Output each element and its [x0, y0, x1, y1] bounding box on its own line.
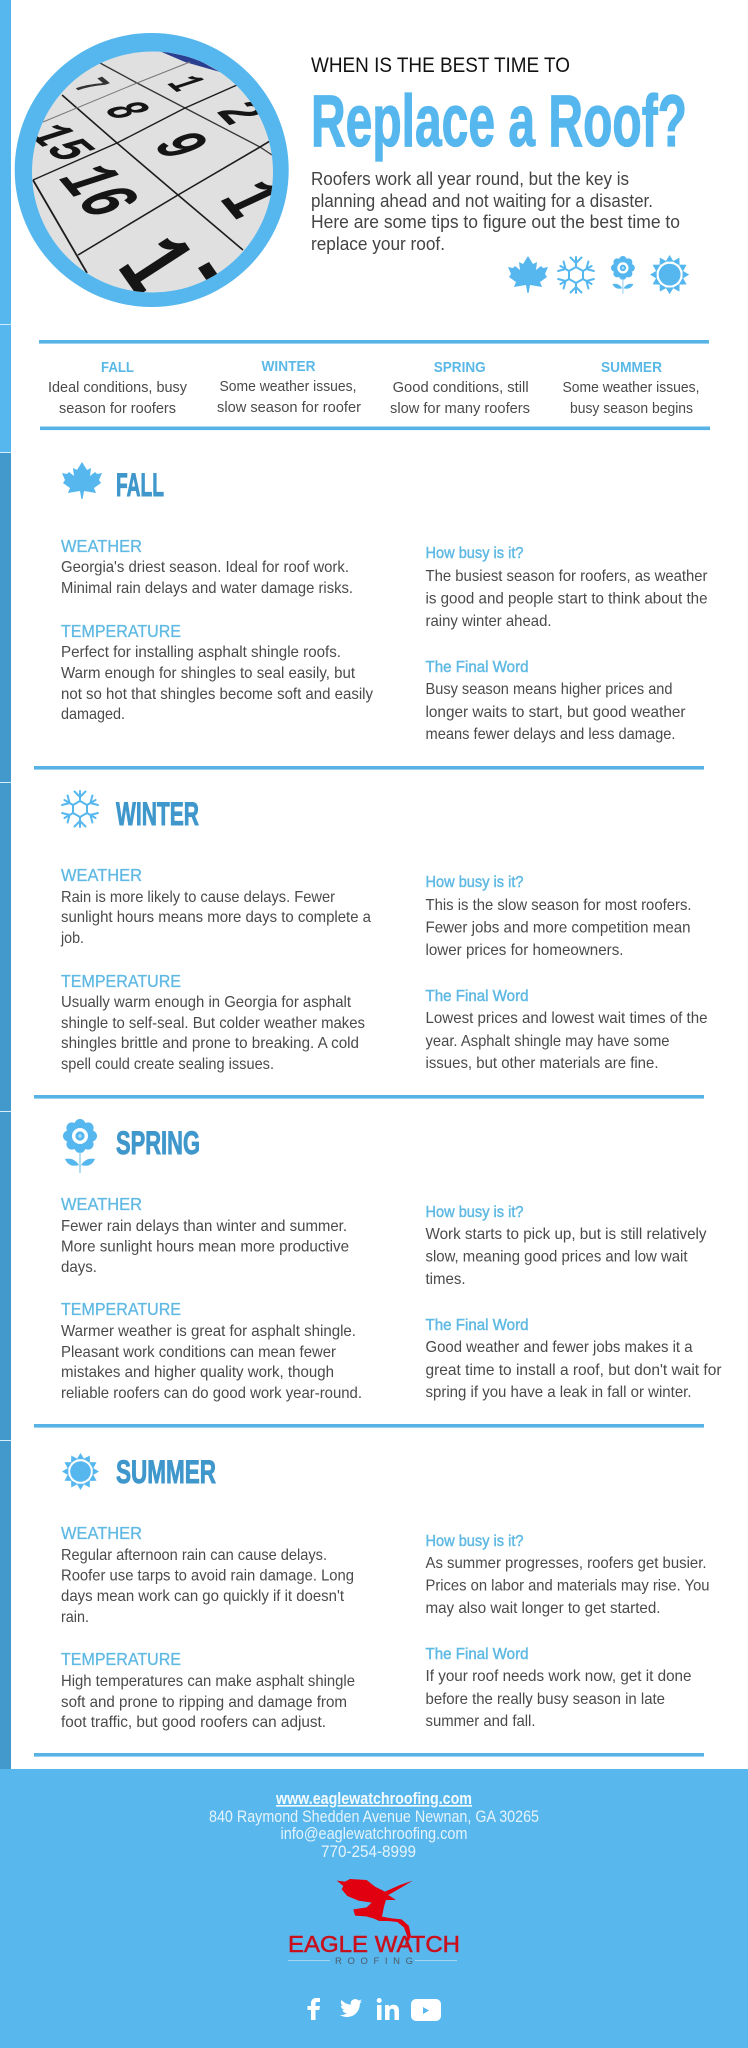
fall right column: longer waits to start, but good weather: [426, 704, 686, 721]
calendar photo in circle: 1: [152, 71, 216, 97]
fall right column: rainy winter ahead.: [426, 613, 552, 630]
winter left column: shingle to self-seal. But colder weather makes: [61, 1015, 365, 1032]
spring left column: WEATHER: [61, 1194, 142, 1214]
spring left column: More sunlight hours mean more productive: [61, 1238, 349, 1256]
spring right column: Work starts to pick up, but is still relatively: [426, 1226, 706, 1243]
intro paragraph: planning ahead and not waiting for a disaster.: [311, 191, 653, 211]
winter left column: Rain is more likely to cause delays. Fewer: [61, 889, 336, 906]
icon: facebook: [308, 1998, 320, 2020]
icon: maple leaf: [62, 462, 102, 499]
winter right column: Lowest prices and lowest wait times of the: [426, 1010, 708, 1027]
winter right column: How busy is it?: [426, 874, 524, 891]
fall right column: The Final Word: [426, 659, 528, 676]
spring left column: Pleasant work conditions can mean fewer: [61, 1344, 337, 1361]
spring right column: How busy is it?: [426, 1204, 524, 1221]
panel: winter: [34, 791, 708, 1099]
summary: fall: Ideal conditions, busy: [48, 379, 187, 396]
fall left column: TEMPERATURE: [61, 621, 181, 641]
summer left column: High temperatures can make asphalt shingle: [61, 1673, 355, 1690]
panel: summer: [34, 1453, 710, 1757]
fall right column: means fewer delays and less damage.: [426, 726, 676, 743]
heading: winter: WINTER: [116, 796, 199, 832]
winter left column: Usually warm enough in Georgia for asphalt: [61, 994, 352, 1011]
icon: twitter: [340, 1999, 362, 2017]
fall left column: not so hot that shingles become soft and easily: [61, 686, 373, 703]
summary: fall: FALL: [101, 359, 134, 376]
calendar photo in circle: 1: [89, 217, 213, 316]
winter right column: The Final Word: [426, 988, 528, 1005]
summer left column: Regular afternoon rain can cause delays.: [61, 1547, 327, 1564]
summary: spring: SPRING: [434, 359, 486, 376]
spring right column: The Final Word: [426, 1317, 528, 1334]
logo: eagle watch roofing: [288, 1879, 460, 1967]
calendar photo in circle: 7: [60, 73, 119, 99]
fall left column: damaged.: [61, 706, 125, 723]
summary: spring: Good conditions, still: [393, 379, 529, 396]
icon: sun: [62, 1453, 99, 1490]
summer right column: The Final Word: [426, 1646, 528, 1663]
summer left column: soft and prone to ripping and damage from: [61, 1694, 347, 1711]
summer right column: As summer progresses, roofers get busier.: [426, 1555, 706, 1572]
summary: winter: Some weather issues,: [220, 378, 356, 395]
calendar photo in circle: 15: [9, 118, 108, 168]
winter left column: shingles brittle and prone to breaking. A cold: [61, 1035, 359, 1052]
summer left column: days mean work can go quickly if it doesn't: [61, 1588, 345, 1605]
calendar photo in circle: 2: [197, 94, 278, 133]
fall right column: How busy is it?: [426, 545, 524, 562]
spring right column: spring if you have a leak in fall or winter.: [426, 1384, 692, 1401]
heading: fall: FALL: [116, 467, 164, 503]
winter right column: This is the slow season for most roofers.: [426, 897, 692, 914]
icon: sun: [650, 255, 689, 294]
fall left column: WEATHER: [61, 536, 142, 556]
intro paragraph: Here are some tips to figure out the best time to: [311, 212, 680, 232]
season summary strip: [39, 340, 710, 430]
spring right column: times.: [426, 1271, 466, 1288]
summer left column: WEATHER: [61, 1523, 142, 1543]
fall right column: The busiest season for roofers, as weather: [426, 568, 708, 585]
winter left column: [60, 865, 371, 1073]
winter right column: lower prices for homeowners.: [426, 942, 624, 959]
summary: summer: [562, 359, 700, 417]
calendar photo in circle: 9: [131, 125, 222, 169]
calendar photo in circle: 8: [86, 97, 163, 125]
panel: footer: [0, 1769, 748, 2048]
contact details: www.eaglewatchroofing.com: [275, 1790, 472, 1808]
calendar photo in circle: 1: [195, 169, 300, 232]
header text block: [311, 54, 687, 254]
summary: fall: [48, 359, 187, 417]
fall right column: is good and people start to think about the: [426, 590, 708, 608]
spring left column: mistakes and higher quality work, though: [61, 1364, 334, 1381]
fall left column: Georgia's driest season. Ideal for roof work.: [61, 559, 349, 576]
icon: snowflake: [558, 257, 594, 293]
summary: summer: busy season begins: [570, 400, 693, 417]
summary: summer: Some weather issues,: [562, 379, 700, 396]
summer left column: TEMPERATURE: [61, 1649, 181, 1669]
summer left column: foot traffic, but good roofers can adjust.: [61, 1714, 326, 1731]
season icons row: [508, 255, 689, 294]
intro paragraph: [311, 169, 680, 254]
contact details: 840 Raymond Shedden Avenue Newnan, GA 30265: [209, 1808, 539, 1826]
spring right column: [426, 1204, 722, 1401]
logo: eagle watch roofing: EAGLE WATCH: [288, 1931, 460, 1957]
summary: spring: slow for many roofers: [390, 400, 530, 417]
icon: flower: [63, 1119, 97, 1173]
spring left column: reliable roofers can do good work year-round.: [61, 1385, 362, 1402]
spring right column: great time to install a roof, but don't wait for: [426, 1362, 722, 1379]
summer right column: summer and fall.: [426, 1713, 536, 1730]
winter left column: spell could create sealing issues.: [61, 1056, 274, 1073]
icon: flower: [611, 256, 635, 294]
fall right column: [426, 545, 708, 743]
icon: linkedin: [377, 1998, 399, 2020]
spring left column: [61, 1194, 362, 1402]
fall left column: [61, 536, 373, 723]
winter right column: Fewer jobs and more competition mean: [426, 920, 690, 936]
summer left column: Roofer use tarps to avoid rain damage. Long: [61, 1568, 354, 1584]
spring left column: TEMPERATURE: [61, 1299, 181, 1319]
winter right column: [426, 874, 708, 1072]
calendar photo in circle: [9, 33, 300, 316]
intro paragraph: replace your roof.: [311, 234, 445, 254]
summer right column: before the really busy season in late: [426, 1691, 665, 1708]
winter right column: issues, but other materials are fine.: [426, 1055, 658, 1072]
fall left column: Minimal rain delays and water damage risks.: [61, 580, 353, 597]
winter left column: job.: [60, 930, 84, 947]
panel: spring: [34, 1119, 722, 1428]
summary: winter: WINTER: [262, 358, 316, 375]
icon: youtube: [411, 1999, 441, 2021]
fall left column: Warm enough for shingles to seal easily, but: [61, 665, 356, 682]
contact details: 770-254-8999: [321, 1843, 416, 1861]
summer left column: [61, 1523, 355, 1731]
icon: leaf: [508, 256, 548, 293]
logo: eagle watch roofing: ROOFING: [335, 1956, 413, 1967]
panel: fall: [34, 462, 708, 770]
summary: fall: season for roofers: [59, 400, 176, 417]
summary: winter: [217, 358, 361, 416]
social icons: [308, 1998, 441, 2021]
winter left column: WEATHER: [61, 865, 142, 885]
fall left column: Perfect for installing asphalt shingle roofs.: [61, 644, 341, 661]
summer right column: How busy is it?: [426, 1533, 524, 1550]
contact details: info@eaglewatchroofing.com: [280, 1825, 468, 1843]
summer right column: may also wait longer to get started.: [426, 1600, 660, 1617]
winter left column: TEMPERATURE: [61, 971, 181, 991]
calendar photo in circle: 16: [34, 156, 157, 227]
summer right column: Prices on labor and materials may rise. You: [426, 1578, 710, 1594]
icon: snowflake: [62, 791, 98, 827]
left side bar: [0, 0, 11, 1769]
spring left column: Warmer weather is great for asphalt shingle.: [61, 1323, 356, 1340]
winter left column: sunlight hours means more days to complete a: [61, 909, 371, 926]
spring left column: Fewer rain delays than winter and summer.: [61, 1218, 347, 1235]
winter right column: year. Asphalt shingle may have some: [426, 1033, 670, 1050]
spring left column: days.: [61, 1259, 97, 1276]
heading: spring: SPRING: [116, 1125, 200, 1161]
heading: summer: SUMMER: [116, 1454, 216, 1490]
spring right column: Good weather and fewer jobs makes it a: [426, 1339, 693, 1356]
summer right column: [426, 1533, 710, 1730]
summer left column: rain.: [61, 1609, 89, 1626]
fall right column: Busy season means higher prices and: [426, 681, 672, 698]
summary: spring: [390, 359, 530, 417]
summary: winter: slow season for roofer: [217, 399, 361, 416]
intro paragraph: Roofers work all year round, but the key is: [311, 169, 629, 189]
contact details: [209, 1790, 539, 1861]
summary: summer: SUMMER: [601, 359, 662, 376]
spring right column: slow, meaning good prices and low wait: [426, 1248, 688, 1266]
summer right column: If your roof needs work now, get it done: [426, 1668, 692, 1685]
kicker heading: WHEN IS THE BEST TIME TO: [311, 54, 570, 77]
